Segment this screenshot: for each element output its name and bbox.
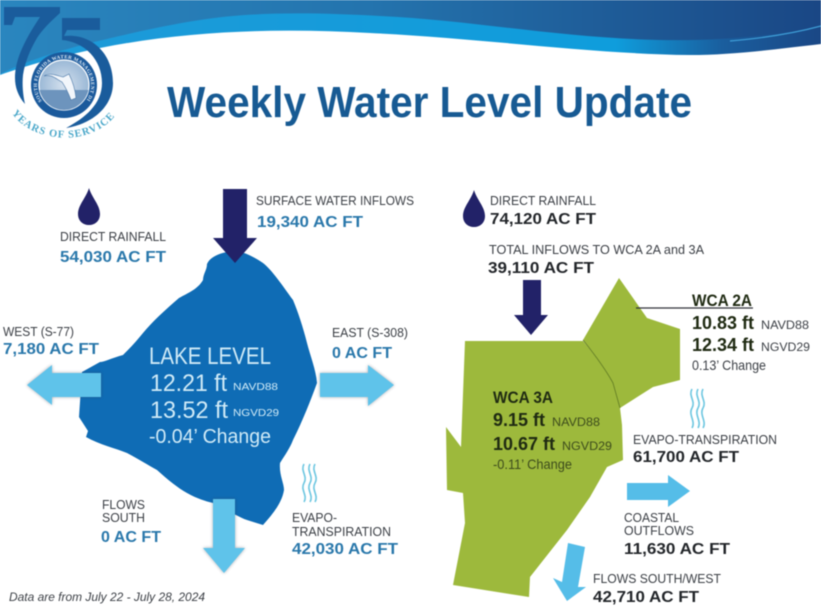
label: west — [3, 324, 99, 358]
header wave banner — [0, 0, 821, 75]
label: coastal outflows: 11,630 AC FT — [624, 541, 730, 558]
label: evapo-transpiration — [633, 432, 777, 466]
readout: wca 3a: 9.15 ft — [493, 410, 545, 430]
label: coastal outflows: COASTAL — [624, 510, 679, 525]
readout: wca 3a: 10.67 ft — [493, 434, 555, 454]
district seal — [30, 52, 98, 119]
label: surface water inflows: 19,340 AC FT — [257, 214, 363, 231]
readout: wca 2a: 10.83 ft — [692, 313, 754, 333]
lake level readout: -0.04’ Change — [149, 426, 271, 448]
label: evapo-transpiration — [292, 510, 398, 558]
lake shape — [79, 251, 317, 525]
label: direct rainfall: DIRECT RAINFALL — [490, 193, 596, 208]
label: east: EAST (S-308) — [332, 325, 408, 340]
map: wca 3a — [446, 341, 623, 597]
label: flows south: 0 AC FT — [101, 529, 161, 546]
boundary between wca 2a and 3a — [583, 340, 620, 408]
arrow: east outflow — [320, 365, 394, 406]
leader line — [636, 307, 753, 309]
readout: wca 2a: 0.13’ Change — [692, 357, 766, 373]
label: east: 0 AC FT — [332, 345, 392, 362]
label: flows south: SOUTH — [102, 510, 145, 525]
readout: wca 3a: NAVD88 — [552, 417, 600, 429]
panel: lake okeechobee — [3, 188, 414, 604]
label: flows south: FLOWS — [102, 497, 145, 512]
label: evapo-transpiration: EVAPO- — [292, 510, 337, 525]
icon: rainfall drop — [463, 190, 485, 227]
title: Weekly Water Level Update — [167, 78, 692, 127]
readout: wca 3a: WCA 3A — [493, 388, 553, 407]
lake level readout — [149, 343, 280, 448]
label: surface water inflows: SURFACE WATER INFLOWS — [256, 193, 414, 208]
arrow: west outflow — [27, 365, 101, 405]
readout: wca 2a: WCA 2A — [692, 291, 752, 310]
numeral 5 — [62, 18, 113, 128]
label: evapo-transpiration: 61,700 AC FT — [633, 449, 739, 466]
label: flows south west: 42,710 AC FT — [593, 589, 699, 606]
label: evapo-transpiration: EVAPO-TRANSPIRATION — [633, 432, 777, 447]
label: flows south west — [593, 571, 721, 606]
label: west: WEST (S-77) — [3, 324, 74, 339]
panel: water conservation areas — [446, 190, 810, 606]
label: total inflows: TOTAL INFLOWS TO WCA 2A and 3A — [489, 242, 704, 257]
lake level readout: 13.52 ft — [150, 397, 228, 424]
date note: Data are from July 22 - July 28, 2024 — [9, 592, 205, 604]
readout: wca 2a: 12.34 ft — [692, 335, 754, 355]
map: wca 2a — [583, 278, 680, 408]
readout: wca 2a: NAVD88 — [761, 320, 809, 332]
label: direct rainfall: 54,030 AC FT — [60, 249, 166, 266]
readout: wca 3a — [493, 388, 612, 472]
logo: 75 years of service — [4, 6, 115, 138]
label: east — [332, 325, 408, 362]
arrow: flows south west — [553, 543, 586, 601]
label: direct rainfall: 74,120 AC FT — [490, 211, 596, 228]
lake level readout: NGVD29 — [233, 408, 280, 419]
label: coastal outflows — [624, 510, 730, 558]
label: coastal outflows: OUTFLOWS — [624, 523, 694, 538]
readout: wca 3a: NGVD29 — [562, 441, 612, 453]
readout: wca 3a: -0.11’ Change — [493, 456, 572, 472]
label: evapo-transpiration: TRANSPIRATION — [292, 524, 391, 539]
label: evapo-transpiration: 42,030 AC FT — [292, 541, 398, 558]
lake level readout: 12.21 ft — [150, 370, 227, 397]
arrow: surface water inflows — [213, 189, 257, 263]
readout: wca 2a: NGVD29 — [761, 342, 810, 354]
icon: evaporation waves — [691, 389, 704, 428]
label: direct rainfall: DIRECT RAINFALL — [60, 229, 166, 244]
years of service text: YEARS OF SERVICE — [12, 108, 115, 138]
label: total inflows — [488, 242, 704, 277]
icon: rainfall drop — [78, 188, 100, 225]
readout: wca 2a — [692, 291, 810, 373]
label: total inflows: 39,110 AC FT — [488, 260, 594, 277]
label: flows south west: FLOWS SOUTH/WEST — [593, 571, 721, 586]
arrow: flows south — [203, 499, 245, 573]
label: direct rainfall — [60, 229, 166, 266]
lake level readout: LAKE LEVEL — [149, 343, 271, 370]
label: surface water inflows — [256, 193, 414, 231]
label: flows south — [101, 497, 161, 546]
numeral 7 — [4, 7, 60, 104]
label: west: 7,180 AC FT — [3, 341, 99, 358]
lake level readout: NAVD88 — [233, 382, 279, 393]
label: direct rainfall — [490, 193, 596, 228]
arrow: coastal outflows — [627, 475, 690, 507]
icon: evaporation waves — [303, 464, 316, 502]
arrow: total inflows — [514, 280, 548, 335]
